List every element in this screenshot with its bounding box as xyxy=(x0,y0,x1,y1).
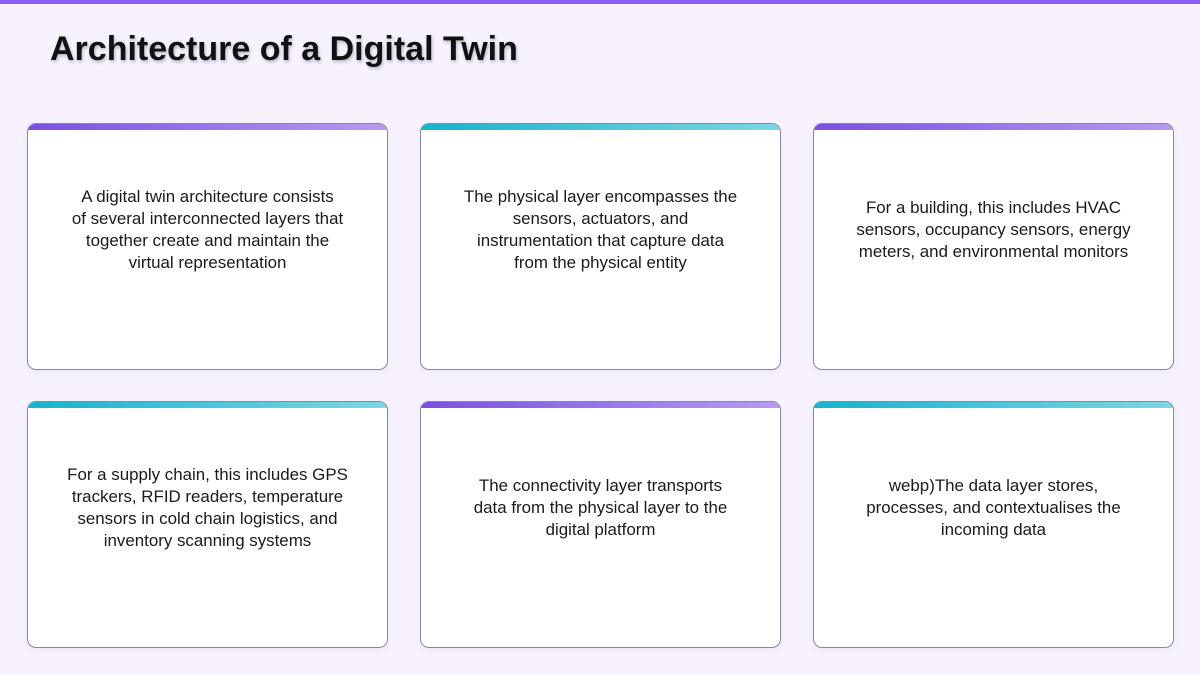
card 3: meters, and environmental monitors xyxy=(859,242,1128,261)
card 6: webp)The data layer stores, xyxy=(889,476,1098,495)
card 2: The physical layer encompasses the xyxy=(464,187,737,206)
card 5: digital platform xyxy=(546,520,655,539)
title: Architecture of a Digital Twin xyxy=(50,30,518,68)
card 2 xyxy=(420,123,781,370)
card 4: inventory scanning systems xyxy=(104,531,311,550)
card 6: processes, and contextualises the xyxy=(866,498,1121,517)
card 4: trackers, RFID readers, temperature xyxy=(72,487,343,506)
card 1: together create and maintain the xyxy=(86,231,329,250)
card 5: The connectivity layer transports xyxy=(479,476,722,495)
card 1: virtual representation xyxy=(129,253,286,272)
card 1 xyxy=(27,123,388,370)
card 1: A digital twin architecture consists xyxy=(81,187,334,206)
card 3 xyxy=(813,123,1174,370)
card 2: from the physical entity xyxy=(514,253,687,272)
card 4: For a supply chain, this includes GPS xyxy=(67,465,348,484)
card 2: sensors, actuators, and xyxy=(513,209,688,228)
card 2: instrumentation that capture data xyxy=(477,231,724,250)
card 5 xyxy=(420,401,781,648)
card 3: For a building, this includes HVAC xyxy=(866,198,1121,217)
card 5: data from the physical layer to the xyxy=(474,498,727,517)
card 4 xyxy=(27,401,388,648)
card 3: sensors, occupancy sensors, energy xyxy=(856,220,1131,239)
card 6: incoming data xyxy=(941,520,1046,539)
card 1: of several interconnected layers that xyxy=(72,209,343,228)
card 4: sensors in cold chain logistics, and xyxy=(77,509,338,528)
card 6 xyxy=(813,401,1174,648)
